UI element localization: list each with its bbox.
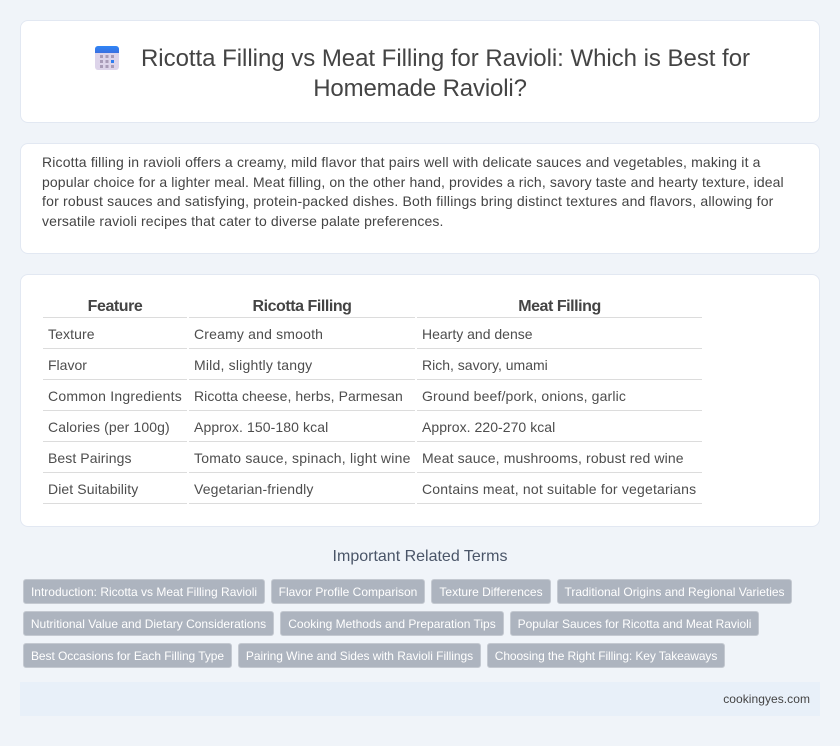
related term tags: Flavor Profile Comparison [279,585,417,599]
related term tags: Pairing Wine and Sides with Ravioli Fillings [246,649,473,663]
comparison table: Calories (per 100g) [48,419,170,435]
title [141,45,750,102]
icon: calendar [95,46,119,70]
text block: introduction: for robust sauces and satisfying, protein-packed dishes. Both fillings bring distinct textures and flavors, allowing for [42,193,774,209]
footer bar [20,682,820,716]
footer source: cookingyes.com [723,692,810,706]
comparison table: Contains meat, not suitable for vegetarians [422,481,696,497]
text block: introduction: Ricotta filling in ravioli offers a creamy, mild flavor that pairs well with delicate sauces and vegetables, making it a [42,154,761,170]
text block: introduction: versatile ravioli recipes that cater to diverse palate preferences. [42,213,444,229]
comparison table: Rich, savory, umami [422,357,548,373]
comparison table: Ricotta Filling [252,298,352,315]
heading: related terms: Important Related Terms [333,548,507,565]
comparison table: Creamy and smooth [194,326,323,342]
related term tags: Choosing the Right Filling: Key Takeaways [495,649,717,663]
title: Ricotta Filling vs Meat Filling for Ravioli: Which is Best for [141,45,750,72]
comparison table: Approx. 220-270 kcal [422,419,555,435]
related term tags: Best Occasions for Each Filling Type [31,649,224,663]
related term tags: Traditional Origins and Regional Varieties [564,585,785,599]
comparison table: Mild, slightly tangy [194,357,312,373]
comparison table: Flavor [48,357,87,373]
comparison table: Ricotta cheese, herbs, Parmesan [194,388,403,404]
title: Homemade Ravioli? [313,75,527,102]
related term tags: Popular Sauces for Ricotta and Meat Ravioli [518,617,751,631]
related term tags: Texture Differences [439,585,543,599]
text block: introduction: popular choice for a lighter meal. Meat filling, on the other hand, provides a rich, savory taste and hearty texture, ideal [42,174,784,190]
comparison table: Hearty and dense [422,326,533,342]
comparison table: Tomato sauce, spinach, light wine [194,450,411,466]
related term tags [23,579,792,668]
panel: introduction [20,143,820,254]
panel: comparison table [20,274,820,527]
comparison table [43,298,702,504]
comparison table: Texture [48,326,95,342]
comparison table: Vegetarian-friendly [194,481,314,497]
comparison table: Best Pairings [48,450,132,466]
related term tags: Cooking Methods and Preparation Tips [288,617,496,631]
comparison table: Meat sauce, mushrooms, robust red wine [422,450,684,466]
related term tags: Nutritional Value and Dietary Considerations [31,617,266,631]
comparison table: Feature [88,298,142,315]
panel: title header [20,20,820,123]
related term tags: Introduction: Ricotta vs Meat Filling Ravioli [31,585,257,599]
comparison table: Common Ingredients [48,388,182,404]
comparison table: Ground beef/pork, onions, garlic [422,388,626,404]
comparison table: Meat Filling [518,298,601,315]
comparison table: Approx. 150-180 kcal [194,419,328,435]
comparison table: Diet Suitability [48,481,138,497]
text block: introduction [42,154,784,229]
